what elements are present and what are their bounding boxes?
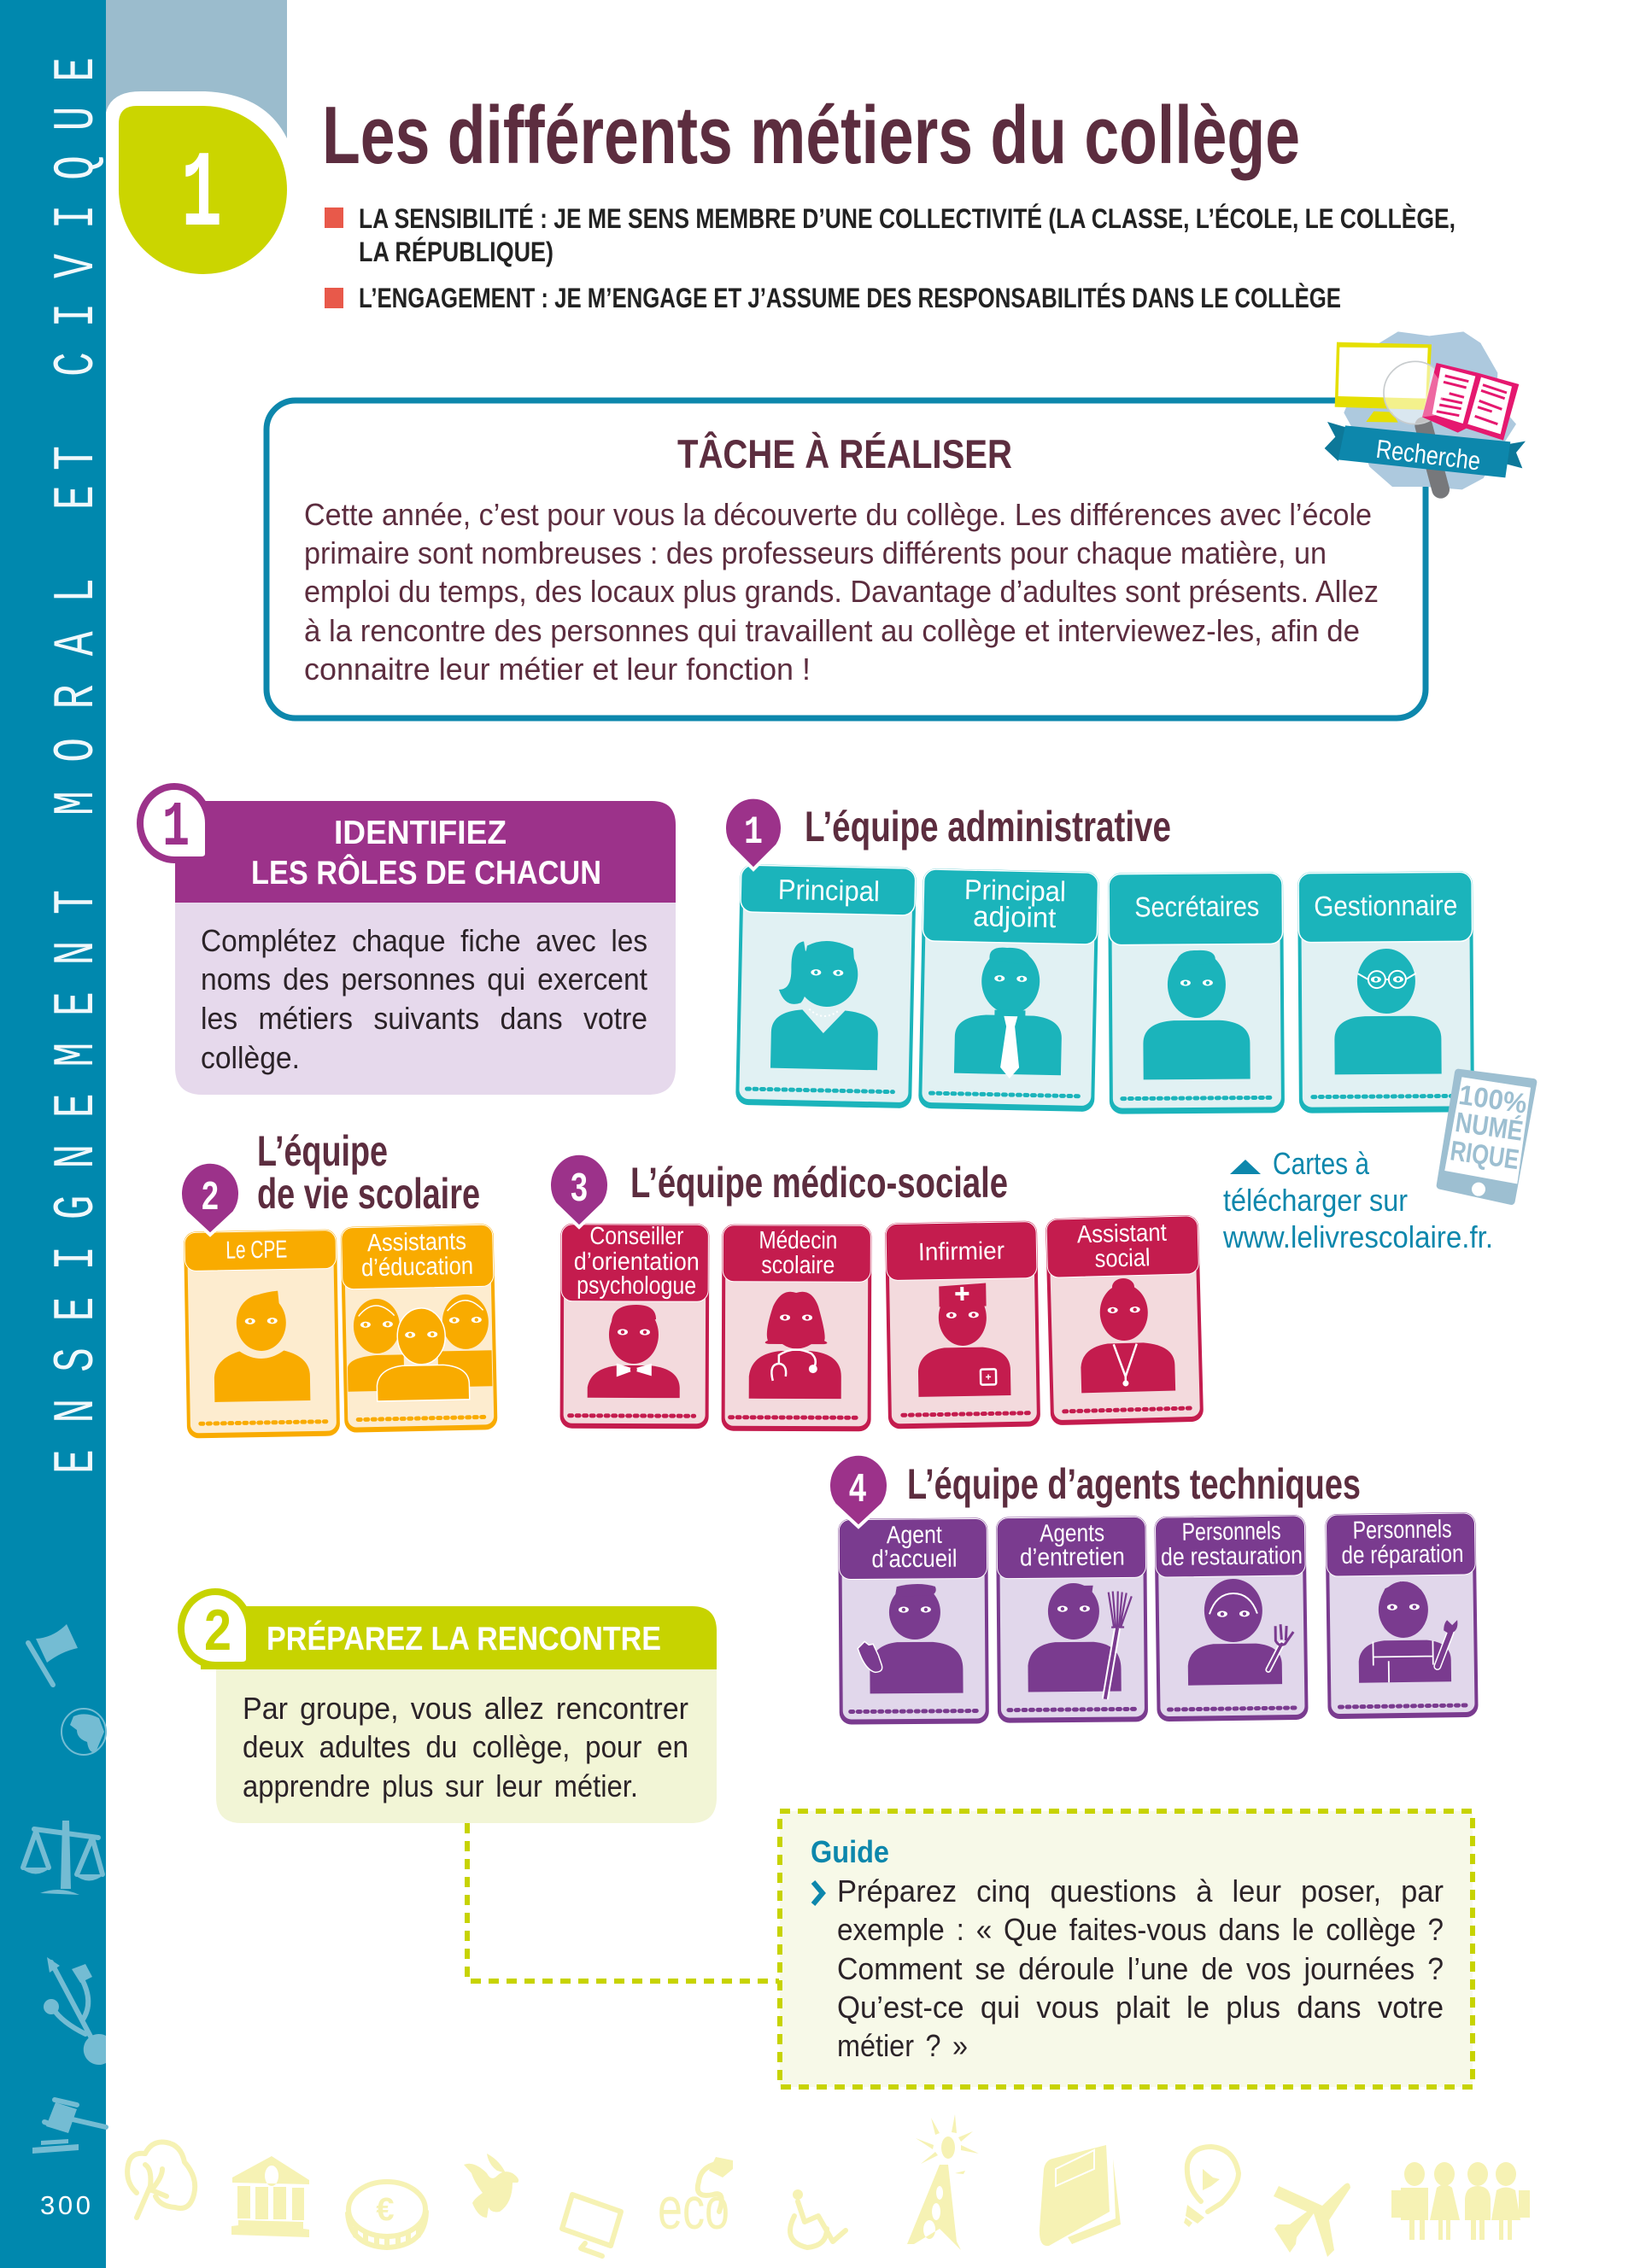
card title: Principal [964,874,1066,907]
portrait [588,1305,680,1398]
card title: Assistants [367,1228,466,1257]
signature line [570,1413,694,1418]
card title: Agents [1040,1520,1104,1547]
card title: Personnels [1352,1516,1452,1545]
icon: flag [28,1624,78,1685]
portrait [770,940,880,1070]
icon: chevron [813,1882,823,1904]
card title: d’entretien [1020,1543,1125,1572]
icon: monitor [562,2195,621,2256]
signature line [747,1089,893,1092]
card title [758,1227,837,1279]
portrait [954,947,1063,1079]
icon: 100% numérique tablet [1440,1073,1533,1201]
icon: euro coin [348,2182,426,2248]
guide heading: Guide [811,1834,889,1869]
card header [723,1225,870,1282]
task text [304,497,1379,687]
panel: préparez la rencontre [178,1588,717,1823]
portrait with wrench [1357,1581,1458,1683]
title: Les différents métiers du collège [322,90,1300,181]
heading [251,815,601,891]
card title [871,1522,958,1573]
team 4 pin [829,1454,888,1527]
guide text: exemple : « Que faites-vous dans le collège ? [837,1912,1444,1947]
card: Principal adjoint [918,868,1099,1112]
instruction text: collège. [201,1040,300,1075]
task text: connaitre leur métier et leur fonction ! [304,652,811,687]
portrait [858,1584,964,1693]
chapter number: 1 [181,135,222,258]
card title: Médecin [758,1227,837,1254]
icon: radio tower [907,2114,979,2250]
card title [1019,1519,1125,1572]
team 2 pin: 2 [202,1173,219,1218]
card title: psychologue [577,1272,696,1300]
chapter number drop [119,106,287,274]
signature line [1009,1709,1135,1710]
card title: de restauration [1161,1542,1303,1571]
decorative icon band [127,2114,1530,2257]
card title: Gestionnaire [1314,889,1457,922]
signature line [851,1710,977,1712]
bullet [325,288,343,308]
team 4 heading: L’équipe d’agents techniques [907,1460,1361,1508]
competency: sensibilité: LA RÉPUBLIQUE) [359,237,554,267]
portrait [213,1290,310,1402]
page number: 300 [40,2190,91,2220]
team 4 pin: 4 [849,1465,866,1510]
heading: IDENTIFIEZ [334,815,507,851]
card title [1160,1517,1303,1571]
signature line [903,1413,1029,1415]
card: Conseiller d'orientation psychologue [560,1223,709,1429]
icon: 100% numérique tablet: 100% [1457,1078,1529,1119]
signature line [930,1093,1078,1096]
icon: eco plug [658,2157,733,2242]
sidebar [0,0,110,2268]
note text: télécharger sur [1223,1183,1408,1218]
icon: book [1040,2145,1121,2246]
team 2 heading: L’équipe [257,1127,388,1175]
icon: tree [127,2142,195,2218]
portrait group [346,1294,493,1402]
portrait [1143,950,1250,1079]
team 1 pin [724,798,782,869]
card title: Personnels [1181,1517,1281,1546]
card title: Agent [887,1522,942,1549]
signature line [1168,1708,1296,1710]
card title: Assistant [1076,1219,1167,1248]
signature line [1064,1408,1192,1412]
portrait with fork [1186,1578,1294,1686]
panel: tâche à réaliser [266,400,1426,718]
step number: 2 [204,1598,231,1663]
card title [1076,1219,1168,1273]
icon: airplane [1274,2183,1350,2257]
card title [574,1223,700,1300]
step number [137,783,212,864]
connector: dotted line to guide [467,1823,779,1981]
icon: 100% numérique tablet: RIQUE [1449,1134,1521,1175]
guide text: Qu’est-ce qui vous plait le plus dans votre [837,1990,1444,2025]
card: Agent d'accueil [838,1517,989,1725]
card header [839,1518,987,1580]
instruction text [243,1691,688,1803]
sidebar vertical label: ENSEIGNEMENT [44,890,110,1474]
team 2 pin [180,1162,240,1235]
card title [360,1228,473,1282]
portrait [1079,1277,1175,1393]
instruction text: apprendre plus sur leur métier. [243,1768,638,1803]
team 3 heading: L’équipe médico-sociale [630,1159,1008,1207]
portrait [749,1292,841,1399]
card: Médecin scolaire [722,1225,871,1431]
card title: de réparation [1341,1540,1464,1569]
link note: cartes à télécharger [1222,1146,1493,1254]
icon: usb [44,1957,106,2065]
team 2 heading: de vie scolaire [257,1170,480,1218]
icon: dove [464,2154,518,2218]
instruction text: Complétez chaque fiche avec les [201,923,647,958]
icon: euro coin: € [376,2192,395,2228]
signature line [1122,1097,1270,1099]
competency: engagement: L’ENGAGEMENT : JE M’ENGAGE ET J’ASSUME DES RESPONSABILITÉS DANS LE COLLÈGE [359,283,1341,313]
card title: Secrétaires [1134,890,1259,922]
signature line [1339,1705,1467,1707]
card header [1155,1516,1305,1577]
card title: scolaire [761,1252,835,1279]
task text: primaire sont nombreuses : des professeurs différents pour chaque matière, un [304,535,1327,570]
guide text: Comment se déroule l’une de vos journées ? [837,1951,1444,1986]
chapter tab [106,0,287,290]
step number [178,1588,253,1669]
note text: Cartes à [1273,1146,1370,1181]
card title: social [1094,1244,1151,1273]
card: Assistant social [1046,1215,1204,1425]
signature line [1313,1096,1453,1097]
card header [922,869,1098,944]
card: Assistants d'éducation [341,1224,498,1433]
icon: recherche badge: Recherche [1374,435,1482,476]
competency: sensibilité [359,203,1456,267]
instruction text: deux adultes du collège, pour en [243,1729,688,1764]
card title: Le CPE [226,1236,288,1265]
team 3 pin: 3 [571,1165,588,1209]
icon: gavel [32,2100,106,2154]
heading: LES RÔLES DE CHACUN [251,853,601,891]
icon: triangle [1230,1160,1261,1174]
card title: d’éducation [361,1253,473,1282]
guide text: métier ? » [837,2028,968,2063]
card header [1326,1513,1475,1576]
card header [741,865,916,915]
card: Principal [735,864,917,1108]
signature line [730,1415,857,1420]
card title [1341,1516,1464,1569]
icon: wheelchair [790,2189,846,2248]
task text: à la rencontre des personnes qui travaillent au collège et interviewez-les, afin de [304,613,1360,648]
card: Personnels de restauration [1154,1515,1309,1721]
heading: PRÉPAREZ LA RENCONTRE [266,1620,661,1657]
card header [184,1230,337,1271]
heading: TÂCHE À RÉALISER [677,431,1012,476]
icon: scales of justice [20,1821,104,1895]
card: Le CPE [184,1229,340,1439]
icon: eco plug: eco [658,2175,729,2242]
card: Infirmier [885,1220,1040,1429]
bullet [325,208,343,228]
icon: globe [62,1709,106,1755]
sidebar vertical label: CIVIQUE [44,57,110,377]
sidebar vertical label: MORAL [44,578,110,815]
card title: d’orientation [574,1248,700,1276]
signature line [358,1417,486,1420]
icon: 100% numérique tablet: NUMÉ [1454,1106,1525,1147]
instruction text: Par groupe, vous allez rencontrer [243,1691,688,1726]
icon: recherche badge [1325,331,1526,489]
card title [964,874,1066,933]
card title: Infirmier [918,1237,1005,1266]
card header [886,1221,1037,1281]
portrait with broom [1028,1582,1133,1699]
card header [561,1225,708,1301]
card header [1298,872,1473,943]
card header [997,1517,1146,1579]
task text: Cette année, c’est pour vous la découverte du collège. Les différences avec l’école [304,497,1372,532]
instruction text [201,923,647,1075]
guide text [837,1873,1444,2063]
step number: 1 [162,792,190,864]
team 3 pin [549,1154,609,1227]
team 1 heading: L’équipe administrative [805,803,1171,850]
portrait [1334,949,1442,1074]
instruction text: les métiers suivants dans votre [201,1001,647,1036]
sidebar vertical label [44,57,110,1474]
team 1 pin: 1 [744,810,763,855]
card title: Conseiller [589,1223,684,1250]
card title: Principal [777,874,880,907]
guide text: Préparez cinq questions à leur poser, par [837,1873,1444,1909]
card header [342,1225,494,1289]
card: Secrétaires [1108,872,1285,1114]
card: Personnels de réparation [1325,1512,1479,1719]
card header [1046,1216,1199,1277]
instruction text: noms des personnes qui exercent [201,962,647,997]
card title: adjoint [973,900,1057,933]
portrait [917,1283,1010,1397]
task text: emploi du temps, des locaux plus grands. Davantage d’adultes sont présents. Allez [304,574,1379,609]
note text [1222,1146,1493,1254]
team 2 heading [257,1127,480,1218]
panel: identifiez les rôles de chacun [137,783,676,1095]
signature line [201,1422,326,1423]
card: Agents d'entretien [996,1516,1148,1723]
icon: bank [231,2156,309,2237]
card title: d’accueil [871,1546,958,1573]
icon: light bulb [1184,2147,1239,2227]
competencies list [325,203,1456,313]
icon: group of people [1391,2162,1530,2240]
note text: www.lelivrescolaire.fr. [1222,1219,1493,1254]
card: Gestionnaire [1297,871,1474,1114]
panel: guide [780,1811,1473,2087]
card header [1109,873,1283,945]
sidebar vertical label: ET [44,446,110,510]
